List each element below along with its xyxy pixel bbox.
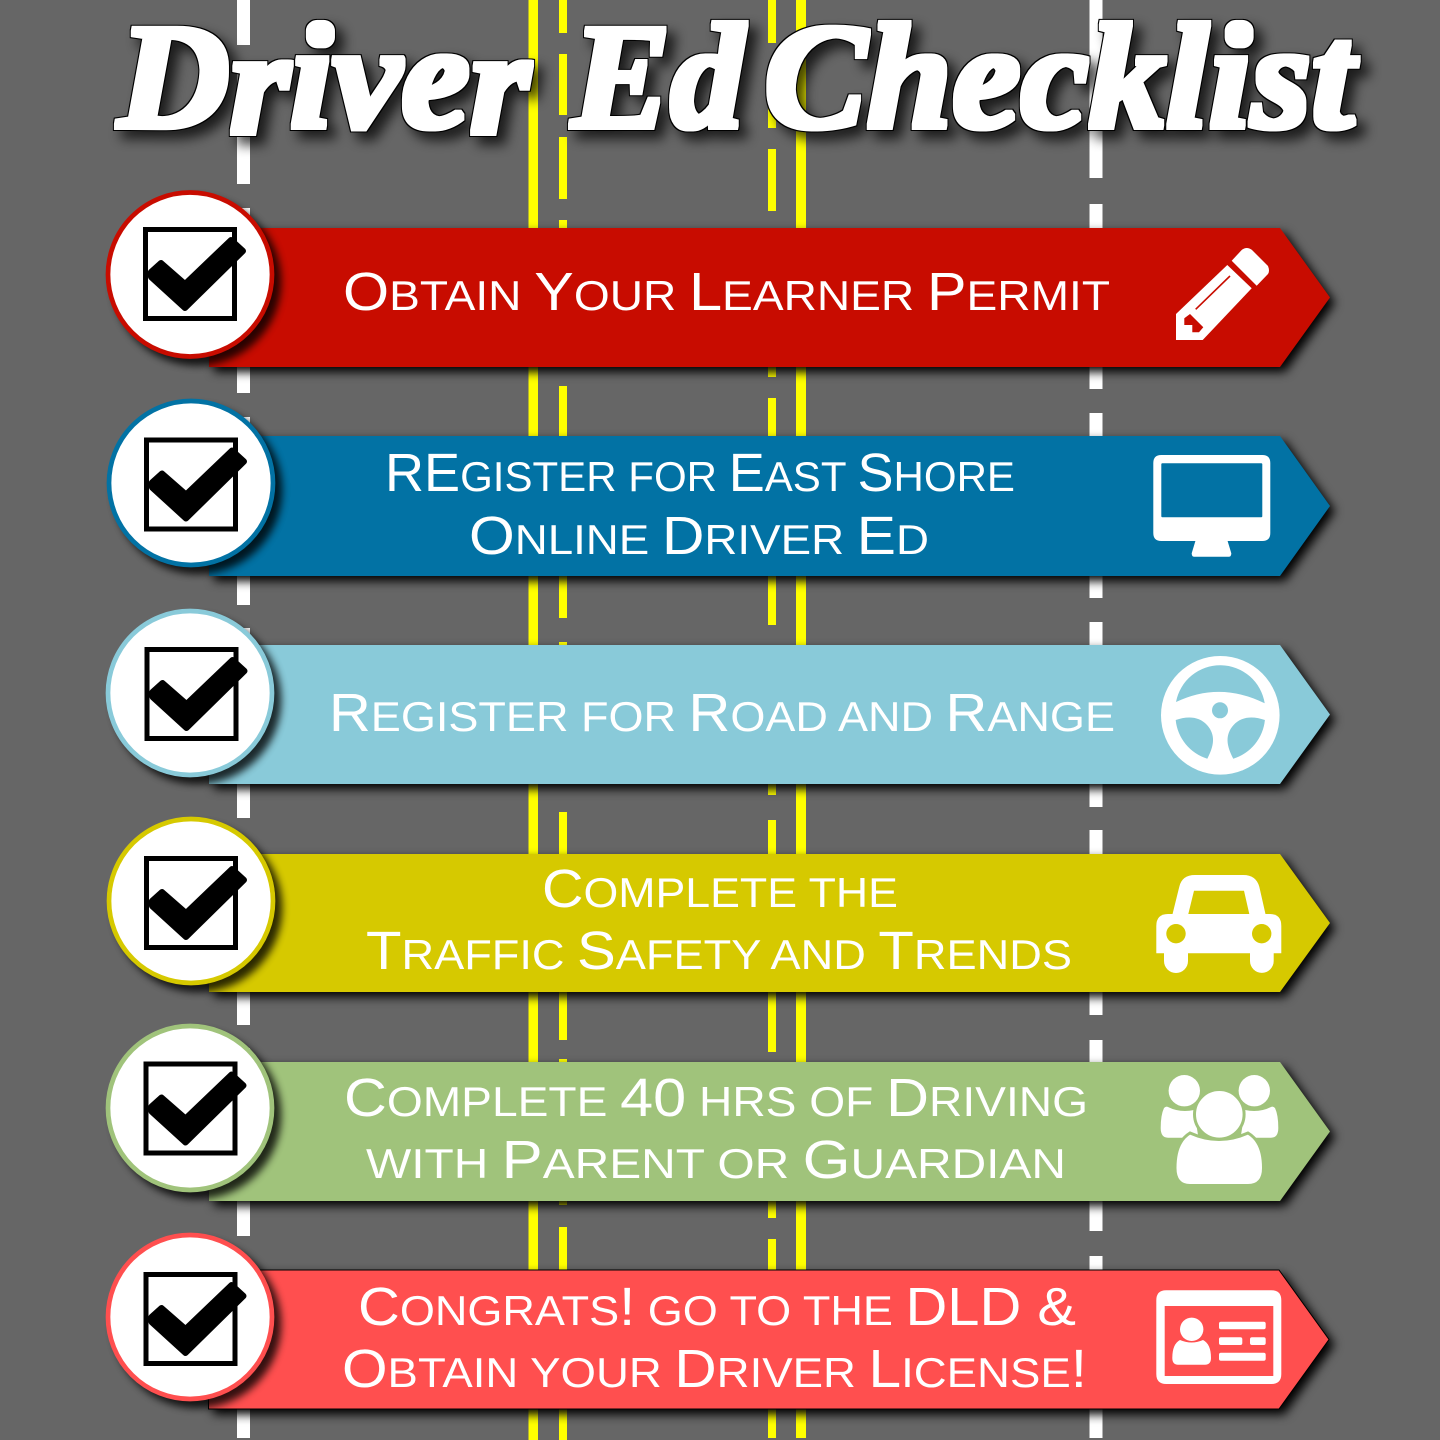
checkbox badge 4	[109, 819, 273, 983]
step 4 text: COMPLETE THE	[542, 859, 898, 919]
title	[116, 0, 1358, 166]
banner 4	[209, 854, 1330, 992]
icon: license card	[1156, 1290, 1281, 1384]
step 5 text: COMPLETE 40 HRS OF DRIVING	[344, 1068, 1088, 1128]
step 4: complete traffic safety and trends	[109, 819, 1330, 992]
checkbox badge 2	[109, 401, 273, 565]
icon: pencil	[1176, 248, 1269, 340]
step 3: register for road and range	[108, 611, 1330, 784]
icon: computer monitor	[1153, 455, 1270, 557]
step 4: complete traffic safety and trends: TRAFFIC SAFETY AND TRENDS	[366, 921, 1072, 981]
step 5: complete 40 hours of driving: WITH PARENT OR GUARDIAN	[366, 1130, 1066, 1190]
step 1 text: OBTAIN YOUR LEARNER PERMIT	[343, 262, 1110, 322]
banner 2	[209, 436, 1330, 576]
checkbox badge 5	[108, 1026, 272, 1190]
checkbox badge 1	[108, 192, 272, 356]
banner 6	[208, 1270, 1329, 1409]
banner 1	[209, 228, 1330, 367]
banner 5	[209, 1062, 1330, 1201]
icon: car	[1156, 875, 1281, 973]
step 2: register for online driver ed: ONLINE DRIVER ED	[469, 506, 929, 566]
step 5: complete 40 hours of driving	[108, 1026, 1330, 1201]
step 6: obtain driver license	[108, 1235, 1329, 1409]
step 2: register for online driver ed	[109, 401, 1330, 576]
step 3 text: REGISTER FOR ROAD AND RANGE	[329, 683, 1115, 743]
step 2 text: REGISTER FOR EAST SHORE	[385, 443, 1015, 503]
step 6 text: CONGRATS ! GO TO THE DLD &	[358, 1277, 1076, 1337]
icon: steering wheel	[1161, 656, 1280, 775]
banner 3	[209, 645, 1330, 784]
step 1: obtain learner permit	[108, 192, 1330, 367]
icon: group of people	[1161, 1075, 1278, 1186]
step 6: obtain driver license: OBTAIN YOUR DRIVER LICENSE!	[342, 1339, 1087, 1399]
checkbox badge 6	[108, 1235, 272, 1399]
checkbox badge 3	[108, 611, 272, 775]
